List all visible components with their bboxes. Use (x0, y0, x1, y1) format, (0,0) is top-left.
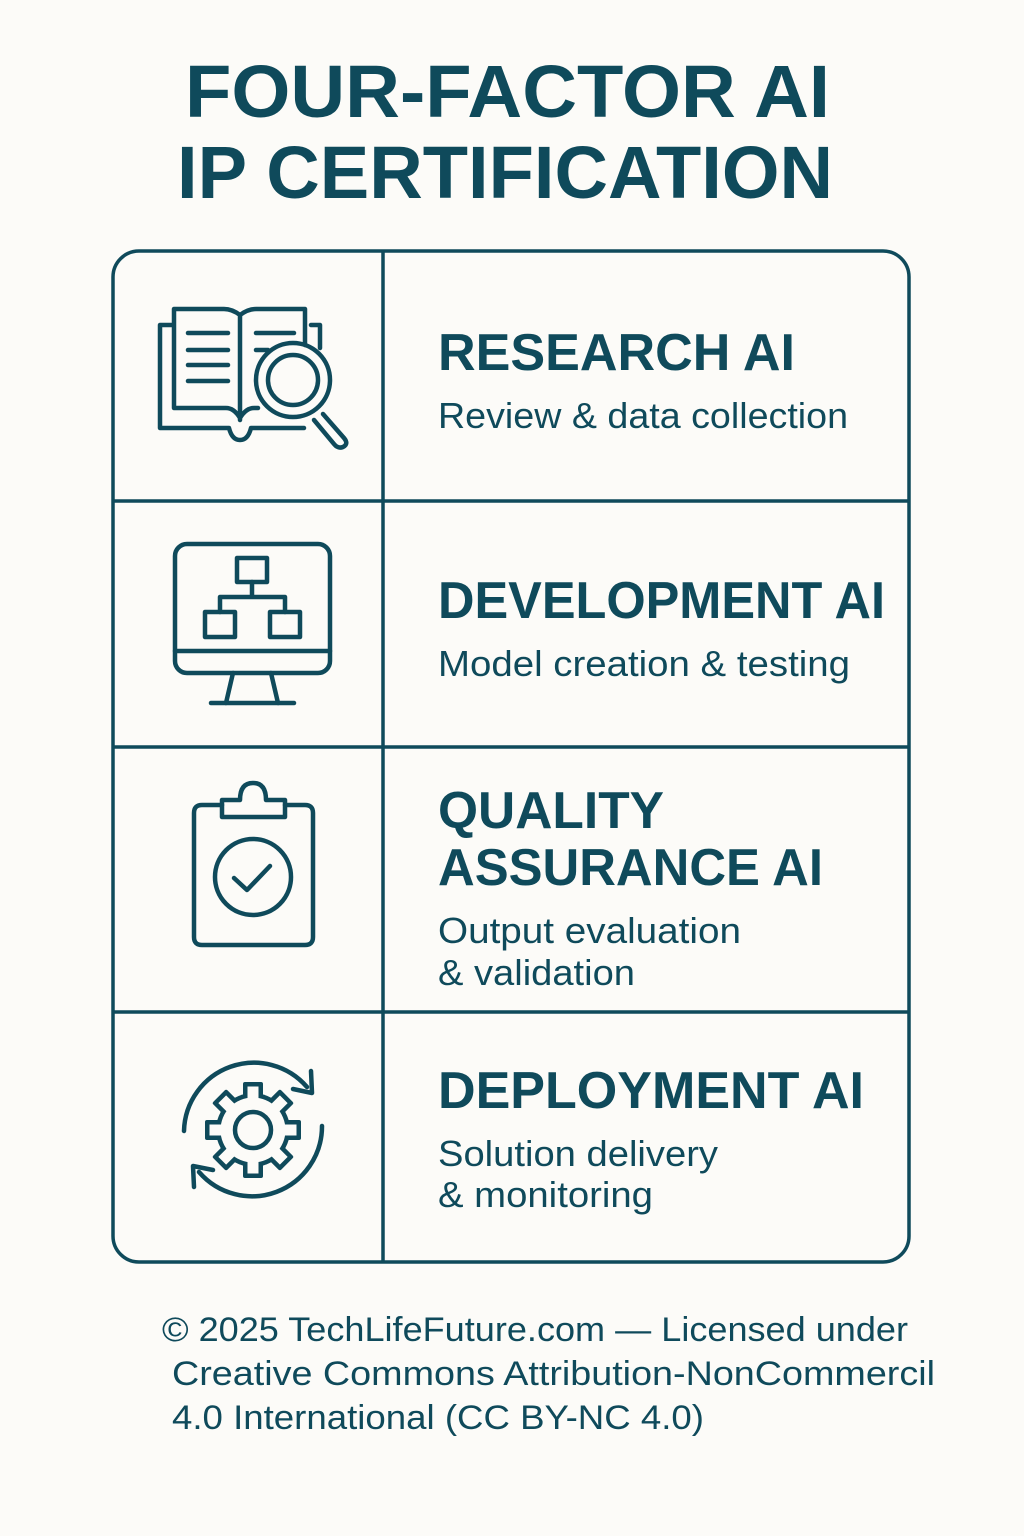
heading: development (438, 572, 885, 684)
heading: quality assurance: ASSURANCE AI (438, 839, 823, 897)
title (177, 50, 833, 214)
table frame (113, 251, 909, 1262)
heading: research: RESEARCH AI (438, 324, 795, 382)
heading: deployment: Solution delivery (438, 1133, 718, 1174)
heading: development: Model creation & testing (438, 643, 850, 684)
heading: quality assurance: QUALITY (438, 782, 664, 840)
icon: clipboard check (194, 783, 313, 945)
footer license: © 2025 TechLifeFuture.com — Licensed under (162, 1311, 908, 1349)
heading: quality assurance: Output evaluation (438, 910, 741, 951)
icon: book with magnifier (160, 309, 346, 448)
heading: development: DEVELOPMENT AI (438, 572, 885, 630)
footer license: Creative Commons Attribution-NonCommercil (172, 1355, 935, 1393)
footer license: 4.0 International (CC BY-NC 4.0) (172, 1399, 704, 1437)
heading: research (438, 324, 848, 436)
title: IP CERTIFICATION (177, 131, 833, 214)
heading: quality assurance (438, 782, 823, 993)
heading: deployment: DEPLOYMENT AI (438, 1062, 864, 1120)
heading: quality assurance: & validation (438, 952, 635, 993)
heading: deployment (438, 1062, 864, 1215)
icon: gear with cycle arrows (184, 1063, 322, 1196)
icon: monitor with org chart (175, 544, 330, 703)
footer license (162, 1311, 935, 1437)
heading: deployment: & monitoring (438, 1174, 653, 1215)
heading: research: Review & data collection (438, 395, 848, 436)
title: FOUR-FACTOR AI (185, 50, 830, 133)
